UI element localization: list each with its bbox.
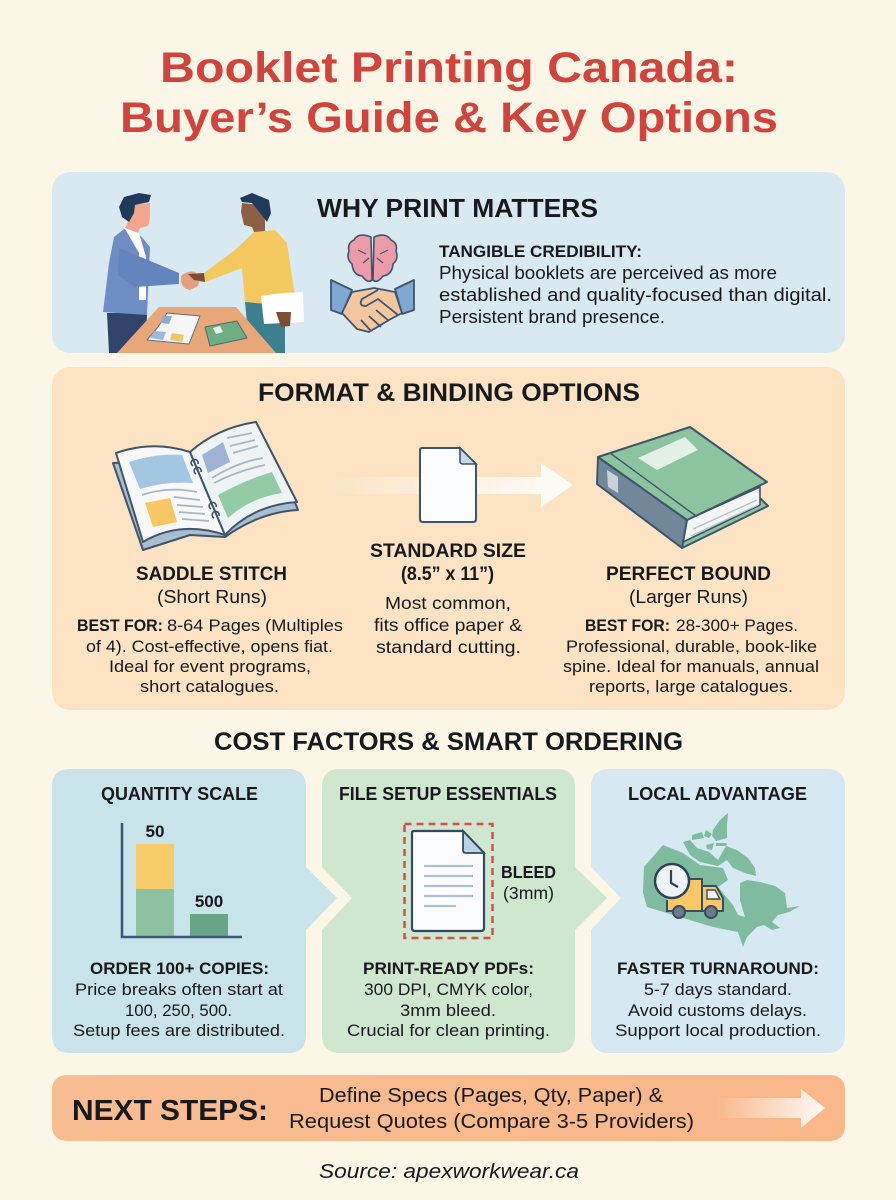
icon: canada map with truck and clock (643, 813, 800, 947)
text: faster turnaround: Support local production. (615, 1021, 821, 1040)
text: print-ready pdfs: 300 DPI, CMYK color, (364, 980, 533, 999)
text: faster turnaround: 5-7 days standard. (644, 980, 792, 999)
column: saddle stitch (77, 564, 343, 696)
illustration: two people shaking hands over a table (103, 193, 304, 353)
heading: why print matters: WHY PRINT MATTERS (317, 195, 598, 223)
card: quantity scale (52, 769, 337, 1053)
heading: cost factors: COST FACTORS & SMART ORDERING (214, 728, 683, 756)
bar chart: 50 vs 500 (122, 822, 242, 937)
card: file setup essentials (322, 769, 607, 1053)
column: saddle stitch: short catalogues. (140, 677, 279, 696)
title: Buyer’s Guide & Key Options (120, 94, 778, 142)
heading: file setup essentials: FILE SETUP ESSENTIALS (339, 784, 557, 804)
column: saddle stitch: BEST FOR: (77, 616, 163, 635)
column: standard size: fits office paper & (374, 615, 522, 635)
title: Booklet Printing Canada: (160, 44, 738, 92)
column: standard size (370, 541, 526, 657)
label: bleed (501, 862, 556, 903)
column: saddle stitch: Ideal for event programs, (109, 657, 311, 676)
text: order 100+ copies (73, 959, 285, 1040)
column: standard size: (8.5” x 11”) (401, 564, 494, 585)
label: next steps: NEXT STEPS: (72, 1095, 268, 1127)
text: faster turnaround: Avoid customs delays. (628, 1001, 807, 1020)
column: saddle stitch: 8-64 Pages (Multiples (167, 616, 343, 635)
column: perfect bound: PERFECT BOUND (606, 564, 771, 585)
text: next steps detail: Define Specs (Pages, Qty, Paper) & (319, 1085, 664, 1107)
column: standard size: standard cutting. (376, 637, 521, 657)
panel: why print matters (52, 172, 845, 353)
icon: standard size sheet (420, 448, 476, 522)
banner: next steps (52, 1075, 845, 1141)
icon: open saddle-stitched booklet (113, 422, 298, 550)
heading: format and binding: FORMAT & BINDING OPTIONS (258, 379, 640, 407)
icon: arrow (320, 463, 573, 507)
text: tangible credibility: Persistent brand presence. (439, 307, 665, 327)
icon: arrow (716, 1089, 825, 1128)
column: standard size: Most common, (385, 593, 511, 613)
bar chart: 50 vs 500: 50 (146, 822, 164, 841)
column: perfect bound: (Larger Runs) (629, 587, 748, 607)
column: perfect bound: reports, large catalogues. (589, 677, 793, 696)
card: local advantage (591, 769, 845, 1053)
column: saddle stitch: (Short Runs) (157, 587, 267, 607)
column: perfect bound (563, 564, 819, 696)
text: tangible credibility (439, 242, 832, 327)
source line: Source: apexworkwear.ca (319, 1161, 579, 1183)
text: next steps detail: Request Quotes (Compare 3-5 Providers) (289, 1111, 694, 1133)
text: faster turnaround: FASTER TURNAROUND: (617, 959, 819, 978)
column: perfect bound: spine. Ideal for manuals, annual (563, 657, 819, 676)
column: perfect bound: 28-300+ Pages. (676, 616, 798, 635)
text: next steps detail (289, 1085, 694, 1133)
panel: format and binding options (52, 367, 845, 710)
icon: brain over handshake (331, 235, 414, 332)
column: perfect bound: BEST FOR: (585, 616, 670, 635)
label: bleed: (3mm) (503, 883, 554, 903)
column: saddle stitch: SADDLE STITCH (136, 564, 287, 585)
column: perfect bound: Professional, durable, book-like (566, 637, 817, 656)
bar chart: 50 vs 500: 500 (195, 892, 223, 911)
text: order 100+ copies: ORDER 100+ COPIES: (90, 959, 269, 978)
title (120, 44, 778, 142)
text: order 100+ copies: 100, 250, 500. (125, 1001, 232, 1020)
heading: local advantage: LOCAL ADVANTAGE (628, 784, 807, 804)
icon: document with dashed bleed line (404, 824, 492, 938)
text: tangible credibility: TANGIBLE CREDIBILITY: (439, 242, 642, 261)
heading: quantity scale: QUANTITY SCALE (101, 784, 258, 804)
text: print-ready pdfs: Crucial for clean printing. (347, 1021, 550, 1040)
text: print-ready pdfs (347, 959, 550, 1040)
text: print-ready pdfs: 3mm bleed. (400, 1001, 496, 1020)
text: tangible credibility: Physical booklets are perceived as more (439, 263, 777, 283)
icon: perfect bound book (597, 427, 768, 548)
column: standard size: STANDARD SIZE (370, 541, 526, 562)
label: bleed: BLEED (501, 862, 556, 882)
text: order 100+ copies: Setup fees are distributed. (73, 1021, 285, 1040)
text: print-ready pdfs: PRINT-READY PDFs: (363, 959, 534, 978)
text: tangible credibility: established and quality-focused than digital. (439, 285, 832, 305)
text: faster turnaround (615, 959, 821, 1040)
text: order 100+ copies: Price breaks often start at (75, 980, 283, 999)
column: saddle stitch: of 4). Cost-effective, opens fiat. (86, 637, 333, 656)
